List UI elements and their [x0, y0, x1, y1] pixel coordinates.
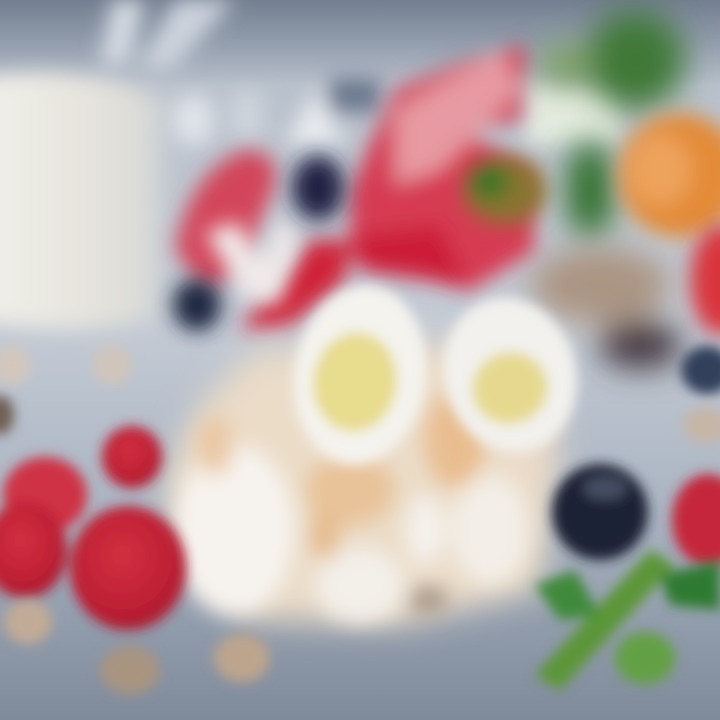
icon: red right edge fruit	[690, 225, 720, 335]
icon: nuts scattered on table	[0, 345, 270, 694]
white U letter	[205, 215, 300, 305]
small dark blueberry right	[681, 346, 720, 443]
icon: glass of milk	[0, 0, 235, 329]
dark blue spots	[173, 156, 344, 331]
icon: blueberry	[552, 464, 648, 560]
green and brown ring center right	[463, 156, 547, 224]
mound details	[175, 392, 530, 623]
icon: raspberries left	[0, 426, 186, 630]
icon: boiled egg left	[282, 277, 438, 473]
icon: green beans	[535, 550, 720, 690]
red lettering and berries, center	[175, 45, 535, 330]
blurred background lettering	[172, 78, 620, 145]
icon: boiled egg right	[426, 283, 594, 467]
icon: orange fruit	[618, 113, 720, 237]
icon: green leaves, top right	[537, 10, 685, 240]
icon: white and yellow food mound	[165, 340, 560, 625]
nuts and dark berries right	[530, 247, 682, 369]
icon: red berry right	[672, 474, 720, 566]
